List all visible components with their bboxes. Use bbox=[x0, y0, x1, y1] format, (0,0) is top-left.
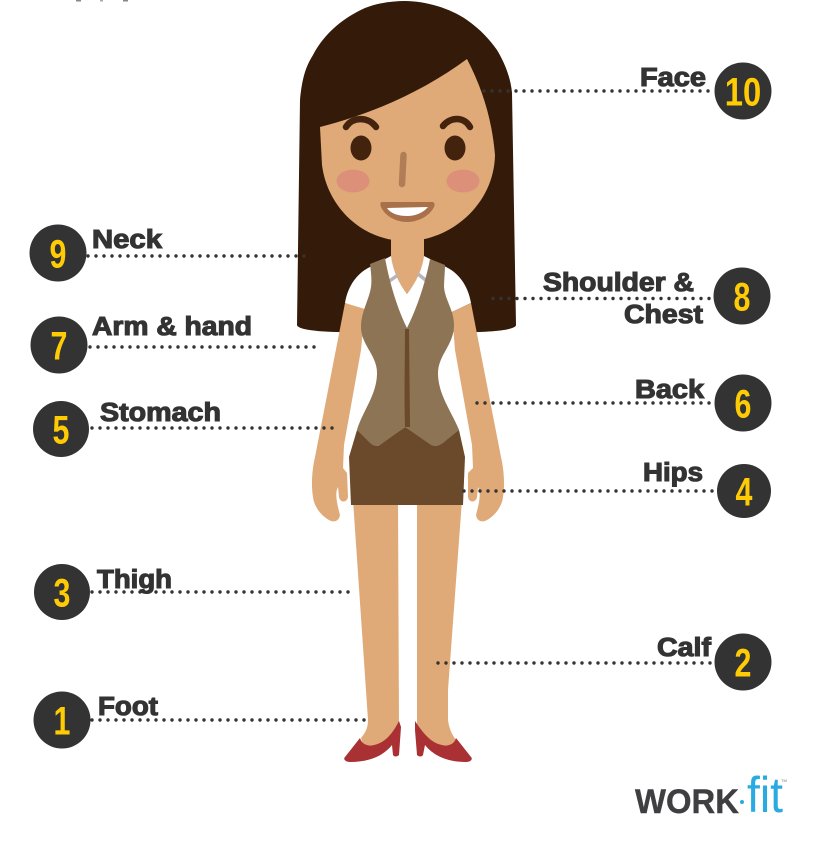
leader line: neck bbox=[88, 254, 308, 258]
label: arm and hand: Arm & hand bbox=[92, 313, 252, 341]
label: back: Back bbox=[635, 376, 705, 404]
nose bbox=[402, 155, 404, 184]
vest zipper bbox=[405, 329, 410, 427]
marker 8: 8 bbox=[734, 274, 750, 320]
marker 5: 5 bbox=[53, 407, 69, 453]
marker 8 bbox=[714, 268, 770, 324]
leader line: shoulder and chest bbox=[493, 297, 716, 300]
marker 2 bbox=[714, 634, 772, 690]
mouth bbox=[380, 202, 435, 222]
leader line: stomach bbox=[92, 426, 336, 430]
marker 6: 6 bbox=[735, 381, 751, 427]
label: shoulder and chest: Chest bbox=[624, 301, 704, 329]
label: hips: Hips bbox=[643, 459, 703, 487]
vest bbox=[357, 258, 459, 446]
marker 7: 7 bbox=[51, 323, 67, 369]
marker 10: 10 bbox=[725, 69, 761, 114]
label: foot: Foot bbox=[98, 693, 159, 721]
shoes bbox=[344, 721, 472, 762]
skirt bbox=[349, 427, 465, 505]
shirt bbox=[345, 256, 471, 330]
marker 3: 3 bbox=[54, 570, 70, 616]
figure: woman bbox=[297, 1, 516, 762]
right arm bbox=[452, 303, 504, 521]
label: face: Face bbox=[640, 64, 706, 92]
label: calf: Calf bbox=[657, 634, 712, 662]
leader line: thigh bbox=[92, 590, 350, 594]
marker 10 bbox=[714, 62, 772, 120]
marker 1: 1 bbox=[54, 698, 70, 744]
cheeks bbox=[336, 170, 480, 192]
neck bbox=[391, 225, 424, 294]
logo: workfit: TM bbox=[781, 778, 787, 783]
marker 3 bbox=[34, 564, 90, 620]
collar stripes bbox=[388, 274, 428, 282]
face bbox=[320, 59, 495, 241]
left arm bbox=[312, 303, 365, 521]
leader line: hips bbox=[464, 489, 716, 493]
leader line: face bbox=[484, 89, 716, 93]
legs bbox=[353, 500, 462, 745]
marker 2: 2 bbox=[735, 640, 751, 686]
marker 9 bbox=[30, 224, 86, 282]
logo: workfit bbox=[635, 767, 787, 823]
label: shoulder and chest bbox=[543, 269, 704, 329]
marker 1 bbox=[34, 692, 90, 748]
marker 9: 9 bbox=[50, 231, 66, 277]
leader line: arm and hand bbox=[90, 345, 318, 349]
logo: workfit: WORK bbox=[635, 783, 739, 821]
eyebrows bbox=[346, 119, 470, 127]
marker 6 bbox=[714, 374, 772, 432]
leader line: back bbox=[477, 401, 716, 405]
marker 4 bbox=[717, 464, 771, 518]
logo: workfit: fit bbox=[747, 767, 783, 823]
label: shoulder and chest: Shoulder & bbox=[543, 269, 694, 297]
label: thigh: Thigh bbox=[97, 566, 172, 594]
leader line: foot bbox=[92, 718, 368, 722]
marker 5 bbox=[33, 401, 89, 457]
marker 4: 4 bbox=[736, 469, 753, 515]
label: neck: Neck bbox=[92, 226, 163, 254]
marker 7 bbox=[30, 316, 88, 374]
label: stomach: Stomach bbox=[100, 399, 221, 427]
leader line: calf bbox=[438, 661, 716, 665]
eyes bbox=[350, 136, 466, 160]
hair bbox=[297, 1, 516, 332]
